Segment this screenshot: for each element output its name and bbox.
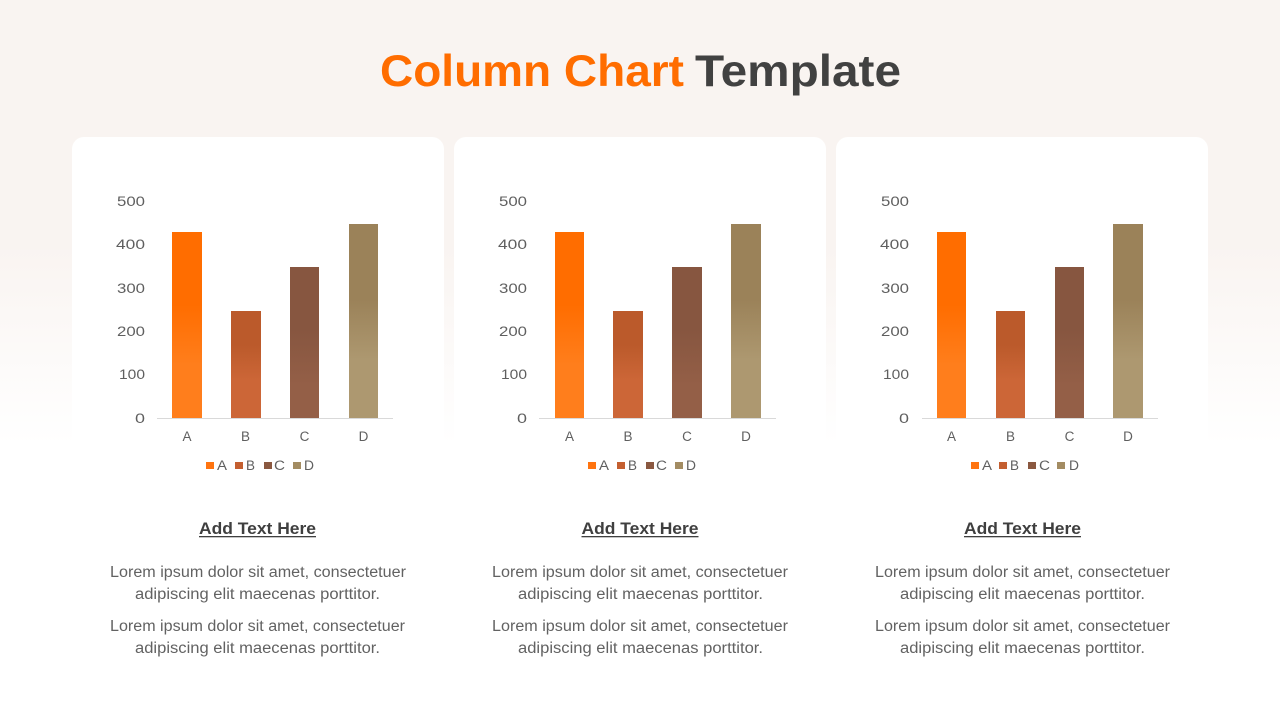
body text: Lorem ipsum dolor sit amet, consectetuer: [492, 564, 788, 581]
card background: [836, 137, 1208, 500]
column chart: D: [1123, 429, 1133, 444]
column chart: 200: [499, 324, 527, 339]
column chart: D: [741, 429, 751, 444]
card background: [72, 137, 444, 500]
column chart: 300: [499, 281, 527, 296]
body text: adipiscing elit maecenas porttitor.: [900, 586, 1145, 603]
legend: [206, 458, 314, 473]
legend: B: [628, 458, 637, 473]
body text: [110, 564, 406, 657]
column chart: 0: [899, 411, 909, 426]
body text: Lorem ipsum dolor sit amet, consectetuer: [492, 618, 788, 635]
column chart: A: [182, 429, 192, 444]
body text: [492, 564, 788, 657]
legend: A: [217, 458, 227, 473]
body text: adipiscing elit maecenas porttitor.: [518, 586, 763, 603]
column chart: 500: [499, 194, 527, 209]
column chart: 100: [119, 367, 145, 382]
column chart: 500: [881, 194, 909, 209]
column chart: B: [241, 429, 250, 444]
column chart: 200: [881, 324, 909, 339]
column chart: 100: [501, 367, 527, 382]
body text: Lorem ipsum dolor sit amet, consectetuer: [110, 564, 406, 581]
column chart: C: [682, 429, 692, 444]
legend: B: [246, 458, 255, 473]
column chart: [498, 194, 776, 444]
legend: C: [1039, 458, 1050, 473]
legend: [971, 458, 1079, 473]
heading: Add Text Here: [582, 519, 698, 538]
column chart: C: [300, 429, 310, 444]
column chart: 400: [116, 237, 145, 252]
column chart: 0: [135, 411, 145, 426]
panel: middle chart card: [454, 137, 826, 657]
column chart: A: [947, 429, 956, 444]
page background: [0, 0, 1280, 445]
column chart: C: [1065, 429, 1075, 444]
column chart: 0: [517, 411, 527, 426]
body text: Lorem ipsum dolor sit amet, consectetuer: [875, 618, 1170, 635]
column chart: 400: [880, 237, 909, 252]
column chart: 200: [117, 324, 145, 339]
panel: left chart card: [72, 137, 444, 657]
legend: D: [304, 458, 314, 473]
body text: adipiscing elit maecenas porttitor.: [135, 586, 380, 603]
column chart: 500: [117, 194, 145, 209]
body text: adipiscing elit maecenas porttitor.: [900, 640, 1145, 657]
heading: Add Text Here: [199, 519, 316, 538]
body text: Lorem ipsum dolor sit amet, consectetuer: [110, 618, 405, 635]
title: Column Chart: [380, 47, 684, 96]
legend: A: [599, 458, 609, 473]
column chart: 100: [883, 367, 909, 382]
heading: Add Text Here: [964, 519, 1081, 538]
column chart: B: [623, 429, 633, 444]
column chart: 400: [498, 237, 527, 252]
card background: [454, 137, 826, 500]
column chart: 300: [881, 281, 909, 296]
legend: C: [656, 458, 667, 473]
column chart: D: [359, 429, 369, 444]
body text: [875, 564, 1170, 657]
legend: [588, 458, 696, 473]
column chart: [880, 194, 1158, 444]
legend: C: [274, 458, 285, 473]
legend: D: [686, 458, 696, 473]
body text: adipiscing elit maecenas porttitor.: [518, 640, 763, 657]
panel: right chart card: [836, 137, 1208, 657]
column chart: 300: [117, 281, 145, 296]
body text: adipiscing elit maecenas porttitor.: [135, 640, 380, 657]
legend: A: [982, 458, 992, 473]
column chart: [116, 194, 393, 444]
body text: Lorem ipsum dolor sit amet, consectetuer: [875, 564, 1170, 581]
column chart: B: [1006, 429, 1015, 444]
title: [380, 47, 901, 96]
legend: B: [1010, 458, 1019, 473]
title: Template: [695, 47, 901, 96]
legend: D: [1069, 458, 1079, 473]
column chart: A: [565, 429, 574, 444]
